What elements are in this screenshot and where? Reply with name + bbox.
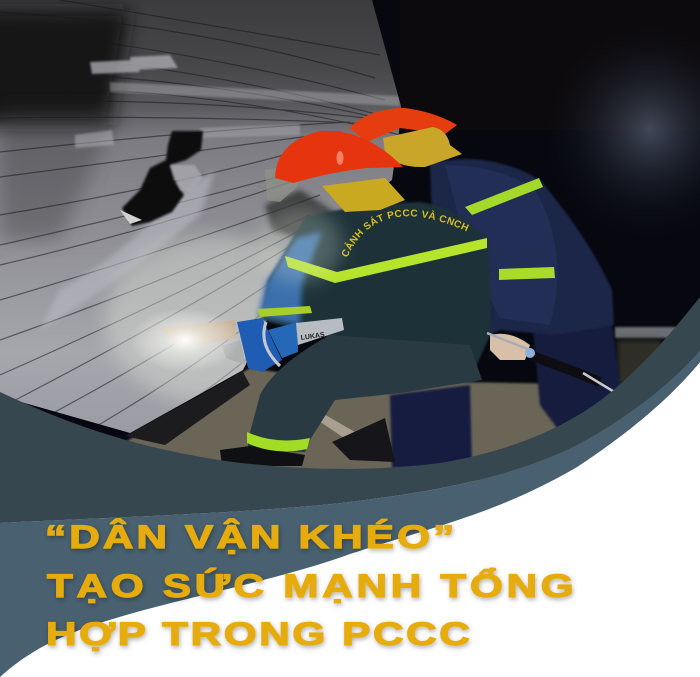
visor [265, 165, 298, 202]
rolling shutter [0, 0, 410, 440]
jacket stripe [285, 238, 487, 283]
photo: firefighters forcing a rolling shutter [0, 0, 700, 481]
teal wave band [0, 350, 700, 677]
title line 3: HỢP TRONG PCCC [46, 616, 470, 652]
trousers [248, 335, 482, 452]
shutter hole [122, 131, 203, 226]
teal jacket [262, 202, 491, 392]
hands [490, 334, 530, 360]
front firefighter [160, 130, 530, 466]
navy trousers [533, 310, 620, 432]
flashlight glare [130, 308, 240, 372]
navy jacket [430, 159, 614, 345]
red helmet [275, 131, 403, 183]
rescue tool: LUKAS [300, 332, 325, 342]
floor [120, 368, 640, 480]
title line 1: “DÂN VẬN KHÉO” [45, 519, 454, 555]
rescue tool [222, 318, 344, 372]
hose and nozzle [487, 333, 616, 393]
yellow hood [322, 178, 405, 212]
back firefighter [349, 108, 620, 468]
photo background: dark night [0, 0, 700, 480]
yellow hood [383, 127, 462, 167]
white lower background [0, 362, 700, 677]
jacket lettering: CẢNH SÁT PCCC VÀ CNCH [342, 209, 469, 256]
shadow under helmet [265, 190, 335, 240]
dark slate wave band [0, 297, 700, 523]
reflective stripes [465, 178, 543, 215]
ankle stripe [247, 432, 310, 451]
boot [220, 446, 305, 466]
title line 2: TẠO SỨC MẠNH TỔNG [47, 567, 574, 604]
red helmet [349, 108, 457, 142]
title [45, 519, 574, 652]
